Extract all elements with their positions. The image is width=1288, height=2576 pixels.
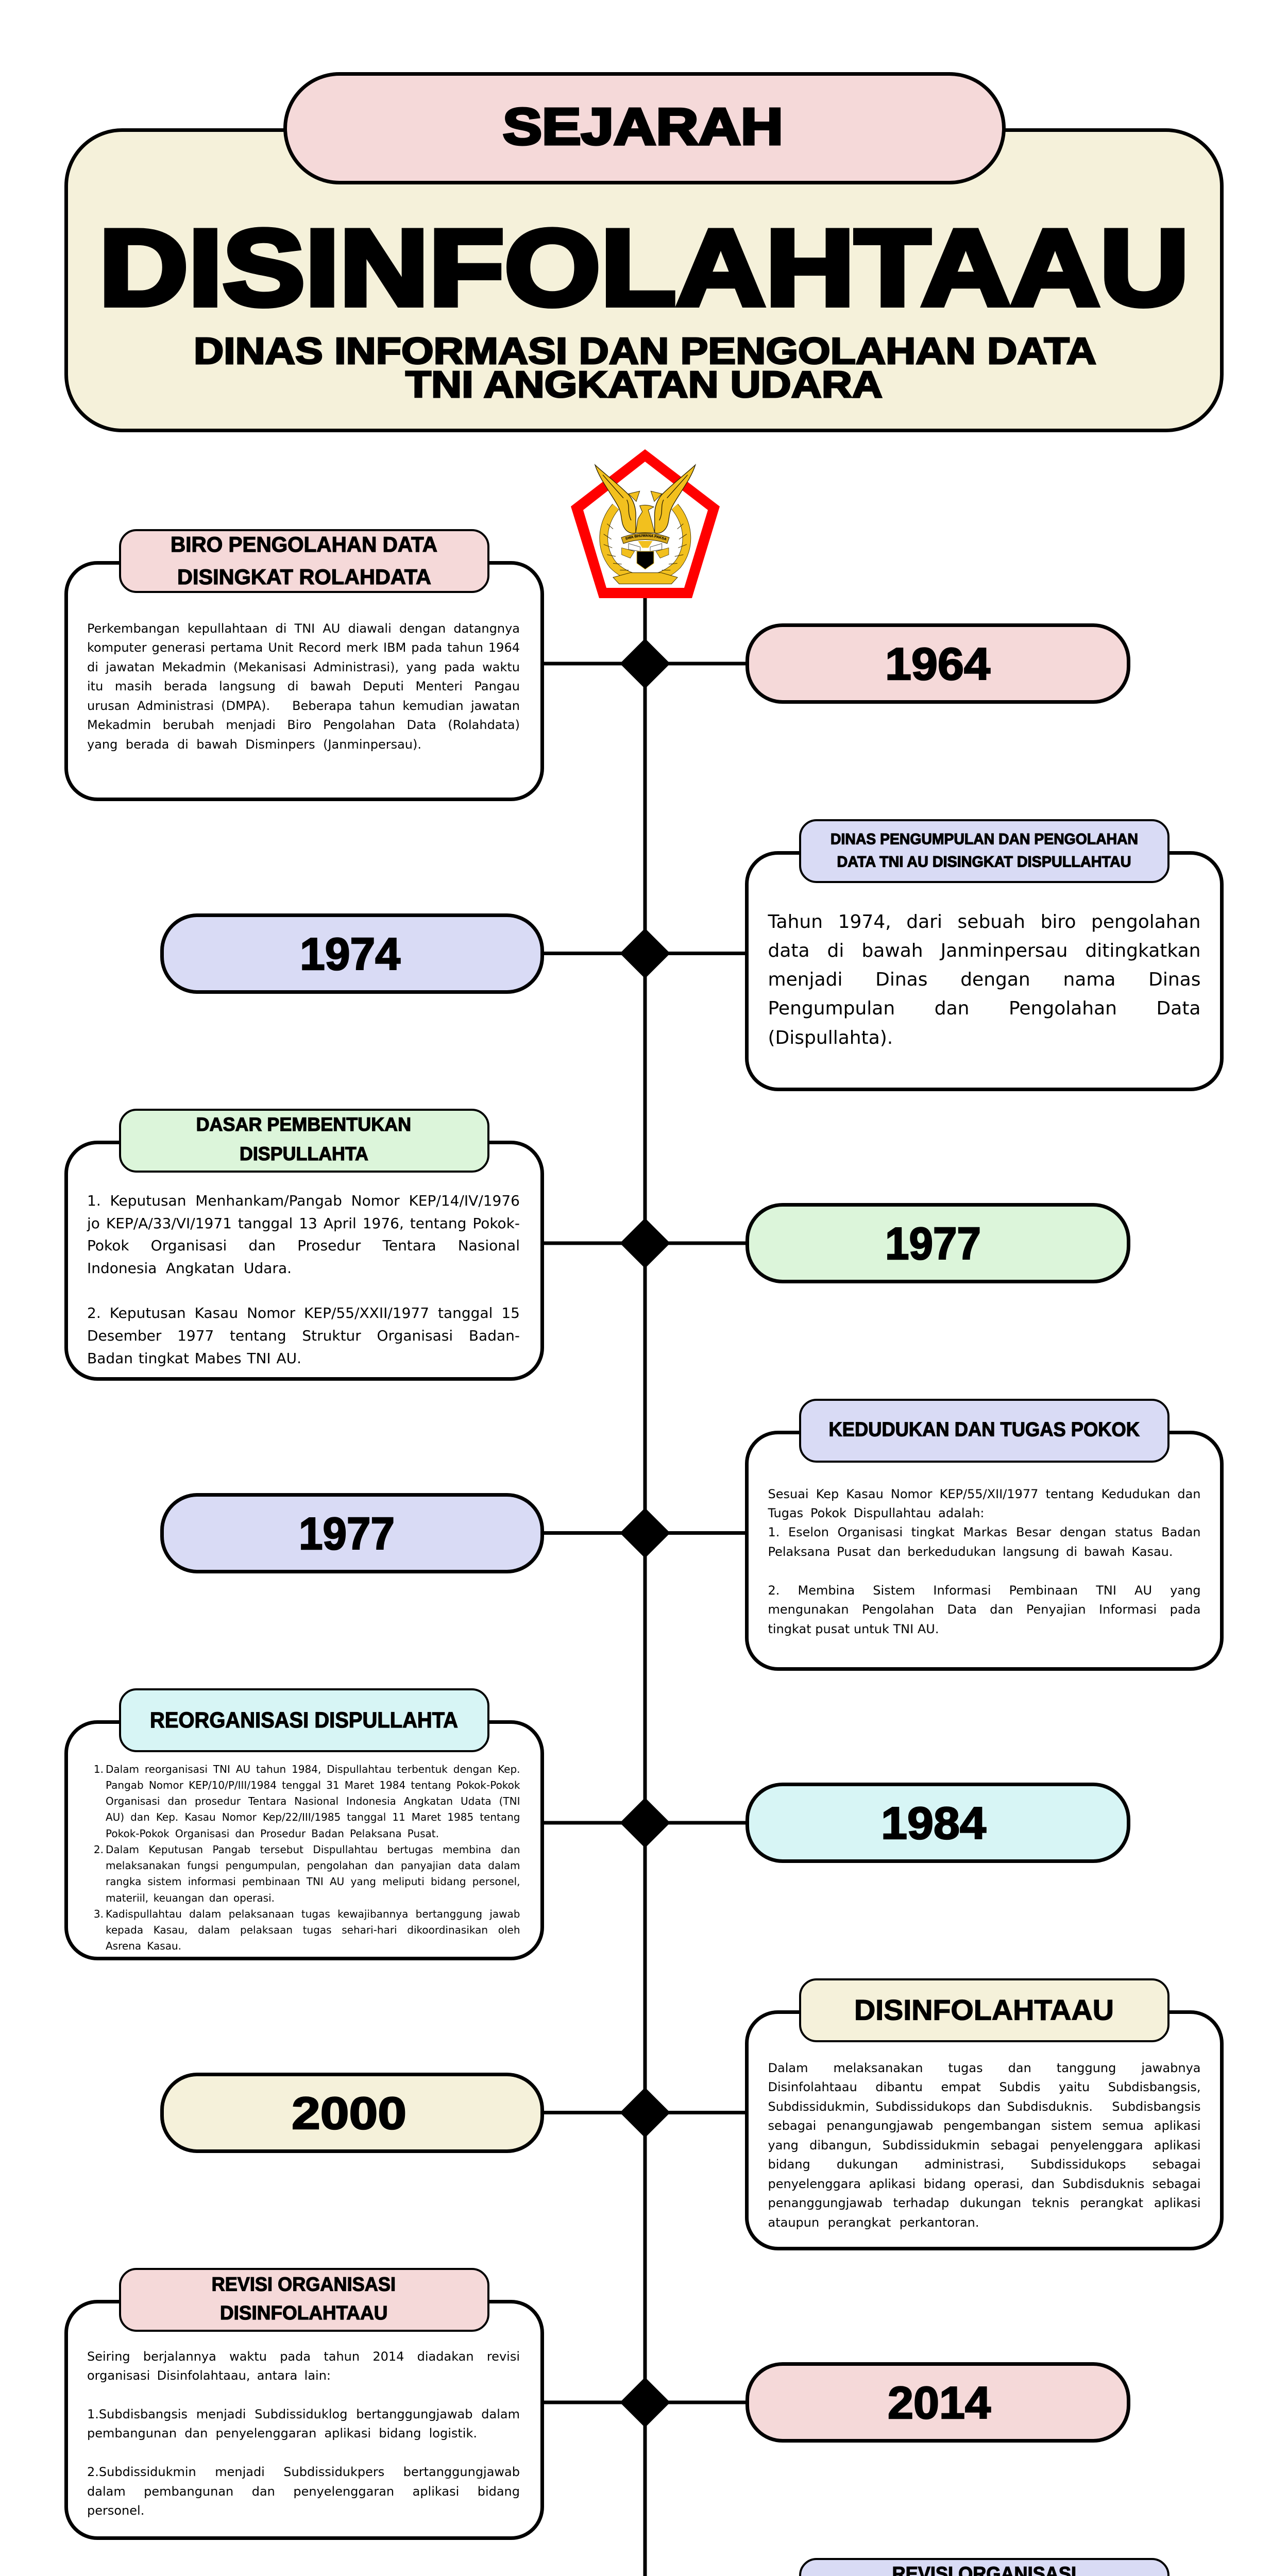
banner text xyxy=(99,98,1189,405)
year pill: 2014 right: 2014 xyxy=(888,2377,991,2428)
banner panel xyxy=(64,128,1224,432)
year pill: 1977 left xyxy=(160,1493,544,1573)
body text: Seiring berjalannya waktu pada tahun 2014 diadakan revisi xyxy=(87,2349,520,2364)
title banner xyxy=(64,72,1224,432)
body text: materiil, keuangan dan operasi. xyxy=(106,1892,275,1904)
year pill: 1977 right xyxy=(745,1203,1130,1283)
banner text: SEJARAH xyxy=(503,98,783,156)
body text: Pelaksana Pusat dan berkedudukan langsung di bawah Kasau. xyxy=(768,1545,1173,1559)
year pill: 1964: 1964 xyxy=(885,638,990,689)
body text: Indonesia Angkatan Udara. xyxy=(87,1260,292,1277)
heading pill xyxy=(119,2268,489,2332)
panel: Disinfolahtaau xyxy=(745,1978,1224,2250)
body text xyxy=(87,1192,520,1367)
body text: Asrena Kasau. xyxy=(106,1940,181,1952)
body text: Dalam melaksanakan tugas dan tanggung jawabnya xyxy=(768,2061,1200,2075)
year pill: 1977 left: 1977 xyxy=(299,1507,395,1559)
body text: 2. Membina Sistem Informasi Pembinaan TNI AU yang xyxy=(768,1583,1200,1598)
connectors xyxy=(541,662,747,2576)
body text xyxy=(768,1487,1200,1636)
body text: jo KEP/A/33/VI/1971 tanggal 13 April 1976, tentang Pokok- xyxy=(87,1215,520,1232)
card outline xyxy=(64,2300,544,2540)
body text: Organisasi dan prosedur Tentara Nasional Indonesia Angkatan Udata (TNI xyxy=(106,1795,520,1807)
body text: urusan Administrasi (DMPA). Beberapa tahun kemudian jawatan xyxy=(87,699,520,713)
heading pill xyxy=(799,1978,1170,2042)
year pill: 1974: 1974 xyxy=(300,928,400,979)
panel: Reorganisasi Dispullahta: 3. xyxy=(94,1908,104,1920)
card outline xyxy=(64,1141,544,1381)
body text: penyelenggara aplikasi bidang operasi, dan Subdisduknis sebagai xyxy=(768,2177,1200,2191)
timeline spine xyxy=(643,598,647,2576)
banner text: DISINFOLAHTAAU xyxy=(99,207,1189,328)
heading pill xyxy=(799,1398,1170,1462)
year pill: 1984: 1984 xyxy=(881,1798,986,1849)
body text: di jawatan Mekadmin (Mekanisasi Administrasi), yang pada waktu xyxy=(87,660,520,674)
heading pill: DISINFOLAHTAAU xyxy=(220,2302,387,2324)
year pill: 1974 xyxy=(160,913,544,993)
diamond markers xyxy=(620,638,670,2576)
body text: ataupun perangkat perkantoran. xyxy=(768,2215,979,2230)
body text: personel. xyxy=(87,2503,144,2518)
body text: rangka sistem informasi pembinaan TNI AU yang meliputi bidang personel, xyxy=(106,1875,520,1888)
logo: TNI AU emblem in red pentagon xyxy=(571,449,720,598)
heading pill xyxy=(119,529,489,593)
body text: Subdissidukmin, Subdissidukops dan Subdisduknis. Subdisbangsis xyxy=(768,2099,1200,2114)
heading pill: DASAR PEMBENTUKAN xyxy=(196,1114,411,1135)
heading pill xyxy=(119,1109,489,1173)
panel: Kedudukan dan Tugas Pokok xyxy=(745,1399,1224,1671)
body text: dalam pembangunan dan penyelenggaran aplikasi bidang xyxy=(87,2484,520,2499)
heading pill: DATA TNI AU DISINGKAT DISPULLAHTAU xyxy=(837,853,1131,870)
body text: melaksanakan fungsi pengumpulan, pengolahan dan panyajian data dalam xyxy=(106,1859,520,1872)
sejarah pill xyxy=(283,72,1006,184)
year pill: 1977 right: 1977 xyxy=(885,1218,981,1269)
panel: Biro Pengolahan Data xyxy=(64,529,544,801)
body text: yang berada di bawah Disminpers (Janminpersau). xyxy=(87,737,421,752)
body text: mengunakan Pengolahan Data dan Penyajian Informasi pada xyxy=(768,1602,1200,1617)
body text: 1. Keputusan Menhankam/Pangab Nomor KEP/14/IV/1976 xyxy=(87,1192,520,1209)
body text: Sesuai Kep Kasau Nomor KEP/55/XII/1977 tentang Kedudukan dan xyxy=(768,1487,1200,1501)
card outline xyxy=(745,851,1224,1091)
body text: Pokok-Pokok Organisasi dan Prosedur Badan Pelaksana Pusat. xyxy=(106,1827,439,1839)
panel: Dasar Pembentukan Dispullahta xyxy=(64,1109,544,1381)
body text: sebagai penangungjawab pengembangan sistem semua aplikasi xyxy=(768,2119,1200,2133)
year pill: 1984 xyxy=(745,1783,1130,1863)
body text: Pokok Organisasi dan Prosedur Tentara Nasional xyxy=(87,1237,520,1254)
body text: Dalam Keputusan Pangab tersebut Dispullahtau bertugas membina dan xyxy=(106,1843,520,1856)
body text xyxy=(768,2061,1200,2230)
body text: tingkat pusat untuk TNI AU. xyxy=(768,1622,939,1636)
body text: organisasi Disinfolahtaau, antara lain: xyxy=(87,2368,331,2383)
body text: Dalam reorganisasi TNI AU tahun 1984, Dispullahtau terbentuk dengan Kep. xyxy=(106,1763,520,1775)
year pill: 1964 xyxy=(745,623,1130,704)
body text: Perkembangan kepullahtaan di TNI AU diawali dengan datangnya xyxy=(87,621,520,636)
body text xyxy=(87,2349,520,2518)
body text: Kadispullahtau dalam pelaksanaan tugas kewajibannya bertanggung jawab xyxy=(106,1908,520,1920)
body text: Badan tingkat Mabes TNI AU. xyxy=(87,1350,301,1367)
card outline xyxy=(64,561,544,801)
body text xyxy=(94,1763,520,1952)
panel: Dinas Pengumpulan dan Pengolahan Data xyxy=(745,819,1224,1091)
heading pill: REVISI ORGANISASI xyxy=(212,2274,396,2296)
panel: Reorganisasi Dispullahta: 1. xyxy=(94,1763,104,1775)
body text: data di bawah Janminpersau ditingkatkan xyxy=(768,940,1200,961)
heading pill: DINAS PENGUMPULAN DAN PENGOLAHAN xyxy=(831,831,1138,848)
body text: 2. Keputusan Kasau Nomor KEP/55/XXII/1977 tanggal 15 xyxy=(87,1304,520,1321)
year pill: 2000 xyxy=(160,2072,544,2153)
body text: komputer generasi pertama Unit Record merk IBM pada tahun 1964 xyxy=(87,640,520,655)
heading pill xyxy=(119,1688,489,1752)
body text: 1. Eselon Organisasi tingkat Markas Besar dengan status Badan xyxy=(768,1525,1200,1539)
body text: kepada Kasau, dalam pelaksaan tugas sehari-hari dikoordinasikan oleh xyxy=(106,1924,520,1936)
body text: AU) dan Kep. Kasau Nomor Kep/22/III/1985 tanggal 11 Maret 1985 tentang xyxy=(106,1811,520,1823)
body text: itu masih berada langsung di bawah Deputi Menteri Pangau xyxy=(87,679,520,693)
body text: (Dispullahta). xyxy=(768,1027,893,1048)
heading pill: DISINGKAT ROLAHDATA xyxy=(177,565,431,589)
body text: bidang dukungan administrasi, Subdissidukops sebagai xyxy=(768,2157,1200,2172)
body text: pembangunan dan penyelenggaran aplikasi bidang logistik. xyxy=(87,2426,477,2441)
heading pill: BIRO PENGOLAHAN DATA xyxy=(171,532,437,556)
heading pill: DISPULLAHTA xyxy=(240,1143,368,1164)
body text xyxy=(768,911,1200,1048)
body text: Desember 1977 tentang Struktur Organisasi Badan- xyxy=(87,1327,520,1344)
logo: TNI AU emblem in red pentagon: SWA BHUWANA PAKSA xyxy=(625,534,666,540)
year pill: 2000: 2000 xyxy=(292,2088,406,2138)
card outline xyxy=(745,2010,1224,2250)
heading pill xyxy=(799,2557,1170,2576)
banner text: TNI ANGKATAN UDARA xyxy=(405,364,883,405)
panel: Revisi Organisasi Disinfolahtaau part 1 xyxy=(64,2268,544,2540)
body text: Disinfolahtaau dibantu empat Subdis yaitu Subdisbangsis, xyxy=(768,2080,1200,2094)
body text: 2.Subdissidukmin menjadi Subdissidukpers bertanggungjawab xyxy=(87,2465,520,2479)
heading pill: DISINFOLAHTAAU xyxy=(854,1994,1114,2026)
panel: Reorganisasi Dispullahta: 2. xyxy=(94,1843,104,1856)
card outline xyxy=(64,1720,544,1960)
body text: penanggungjawab terhadap dukungan teknis perangkat aplikasi xyxy=(768,2196,1200,2210)
body text: Pangab Nomor KEP/10/P/III/1984 tenggal 31 Maret 1984 tentang Pokok-Pokok xyxy=(106,1779,520,1791)
body text: yang dibangun, Subdissidukmin sebagai penyelenggara aplikasi xyxy=(768,2138,1200,2153)
body text: Pengumpulan dan Pengolahan Data xyxy=(768,998,1200,1019)
panel: Reorganisasi Dispullahta xyxy=(64,1688,544,1960)
year pill: 2014 right xyxy=(745,2362,1130,2443)
heading pill xyxy=(799,819,1170,883)
body text: 1.Subdisbangsis menjadi Subdissiduklog bertanggungjawab dalam xyxy=(87,2407,520,2421)
heading pill: KEDUDUKAN DAN TUGAS POKOK xyxy=(828,1418,1140,1440)
body text: menjadi Dinas dengan nama Dinas xyxy=(768,969,1200,990)
body text: Mekadmin berubah menjadi Biro Pengolahan Data (Rolahdata) xyxy=(87,718,520,732)
body text: Tahun 1974, dari sebuah biro pengolahan xyxy=(768,911,1200,933)
heading pill: REORGANISASI DISPULLAHTA xyxy=(150,1708,458,1733)
body text: Tugas Pokok Dispullahtau adalah: xyxy=(768,1506,984,1520)
card outline xyxy=(745,1430,1224,1670)
body text xyxy=(87,621,520,752)
banner text: DINAS INFORMASI DAN PENGOLAHAN DATA xyxy=(194,331,1096,372)
